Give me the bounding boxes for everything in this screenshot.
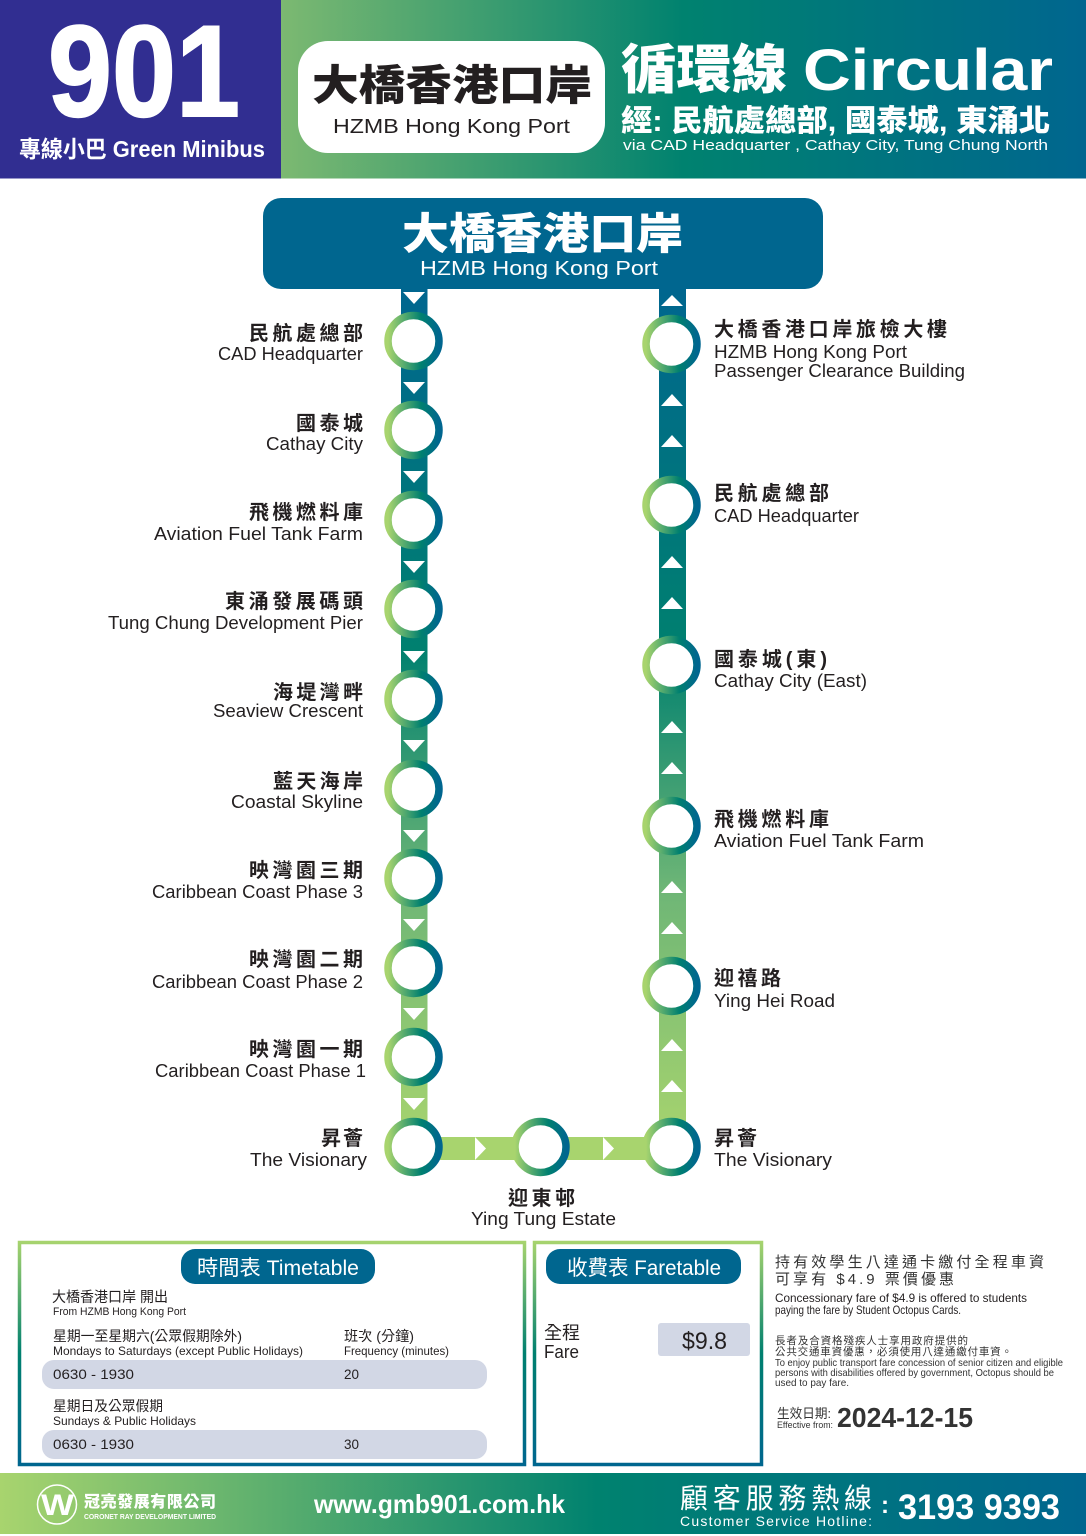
notes: senior concession [775,1334,1063,1389]
station: Cathay City: 國泰城 [296,412,363,435]
notes: student concession: Concessionary fare of $4.9 is offered to students [775,1291,1027,1305]
station: Coastal Skyline: Coastal Skyline [231,792,363,812]
route lines [401,285,686,1160]
station: Passenger Clearance Building: Passenger Clearance Building [714,361,965,381]
station markers [388,316,697,1172]
station: CAD Headquarter (right) [714,481,859,526]
circular route heading: 循環線 [621,41,787,100]
notes: student concession: 可享有 $4.9 票價優惠 [775,1270,954,1288]
weekday schedule: 20 [344,1366,359,1382]
departure point: 大橋香港口岸 開出 [52,1289,168,1306]
notes: senior concession: 公共交通車資優惠，必須使用八達通繳付車資。 [775,1345,1012,1358]
weekday schedule: 0630 - 1930 [53,1366,134,1382]
timetable heading: 時間表 Timetable [197,1257,359,1280]
company name: CORONET RAY DEVELOPMENT LIMITED [84,1514,216,1521]
fare label: 全程 [544,1323,580,1343]
station: Cathay City: Cathay City [266,434,363,454]
station: Aviation Fuel Tank Farm (right): Aviation Fuel Tank Farm [714,831,924,851]
hotline: : [881,1492,889,1519]
station: Caribbean Coast Phase 1: 映灣園一期 [249,1038,363,1061]
vehicle type label: 專線小巴 Green Minibus [19,136,265,162]
notes: senior concession: 長者及合資格殘疾人士享用政府提供的 [775,1334,968,1347]
destination pill [298,41,605,153]
station: Seaview Crescent: Seaview Crescent [213,701,363,721]
route number: 901 [48,0,240,144]
station: Ying Hei Road: 迎禧路 [714,967,781,990]
station: The Visionary (left): 昇薈 [321,1127,363,1150]
station: Passenger Clearance Building: 大橋香港口岸旅檢大樓 [714,317,947,341]
station: Seaview Crescent [213,681,363,721]
via stops: 經: 民航處總部, 國泰城, 東涌北 [621,104,1050,138]
station: Tung Chung Development Pier: 東涌發展碼頭 [225,590,363,613]
station: Passenger Clearance Building [714,317,965,381]
weekday schedule: 星期一至星期六(公眾假期除外) [53,1328,242,1344]
station: Coastal Skyline: 藍天海岸 [273,770,363,793]
station: The Visionary (left): The Visionary [250,1150,367,1170]
station labels: outbound [108,321,616,1229]
company name [84,1492,216,1521]
timetable heading [181,1249,375,1284]
station: Aviation Fuel Tank Farm: 飛機燃料庫 [249,501,363,524]
notes: student concession: 持有效學生八達通卡繳付全程車資 [775,1253,1044,1271]
station: Caribbean Coast Phase 2: 映灣園二期 [249,948,363,971]
station: Caribbean Coast Phase 1 [155,1038,366,1081]
header banner [281,0,1086,178]
sunday schedule: 30 [344,1436,359,1452]
station: CAD Headquarter [218,321,363,364]
hotline: 顧客服務熱線 [680,1483,872,1514]
station: The Visionary (right): The Visionary [714,1150,832,1170]
station: Caribbean Coast Phase 3: Caribbean Coast Phase 3 [152,882,363,902]
station: Cathay City East [714,648,867,691]
weekday schedule [42,1328,487,1389]
station: The Visionary (right) [714,1127,832,1170]
station: Cathay City East: 國泰城(東) [714,648,827,671]
weekday schedule: Mondays to Saturdays (except Public Holidays) [53,1344,303,1358]
hotline: Customer Service Hotline: [680,1513,872,1529]
station: Tung Chung Development Pier: Tung Chung Development Pier [108,613,363,633]
sunday schedule: 0630 - 1930 [53,1436,134,1452]
station: Ying Tung Estate [471,1187,616,1229]
departure point [52,1289,186,1318]
notes: student concession [775,1253,1044,1317]
station: Ying Hei Road: Ying Hei Road [714,991,835,1011]
weekday schedule: 班次 (分鐘) [344,1328,414,1344]
terminus box [263,198,823,289]
station: Ying Tung Estate: Ying Tung Estate [471,1209,616,1229]
station: Cathay City [266,412,363,454]
direction arrows [403,292,683,1160]
station: Cathay City East: Cathay City (East) [714,671,867,691]
icon: company logo: W [41,1489,75,1522]
station: Caribbean Coast Phase 1: Caribbean Coast Phase 1 [155,1061,366,1081]
station: Coastal Skyline [231,770,363,812]
icon: company logo [38,1485,76,1524]
station: CAD Headquarter: 民航處總部 [249,321,363,345]
destination pill: 大橋香港口岸 [312,62,592,109]
station: Ying Hei Road [714,967,835,1011]
station: Seaview Crescent: 海堤灣畔 [273,681,363,704]
notes: student concession: paying the fare by Student Octopus Cards. [775,1303,961,1317]
station: Aviation Fuel Tank Farm: Aviation Fuel Tank Farm [154,524,363,544]
route diagram [263,198,823,1172]
weekday schedule: Frequency (minutes) [344,1344,449,1358]
station: Aviation Fuel Tank Farm (right) [714,808,924,851]
via stops: via CAD Headquarter , Cathay City, Tung Chung North [623,137,1048,154]
hotline: 3193 9393 [898,1488,1060,1527]
effective date: 生效日期: [777,1406,831,1421]
station: CAD Headquarter (right): 民航處總部 [714,481,829,505]
destination pill: HZMB Hong Kong Port [333,116,571,138]
terminus box: 大橋香港口岸 [402,211,683,259]
footer band [0,1473,1086,1534]
faretable heading: 收費表 Faretable [567,1257,721,1280]
station: Passenger Clearance Building: HZMB Hong Kong Port [714,342,907,362]
effective date [777,1402,973,1433]
station: The Visionary (left) [250,1127,367,1170]
notes: senior concession: persons with disabilities offered by government, Octopus should be [775,1367,1054,1379]
station: Aviation Fuel Tank Farm (right): 飛機燃料庫 [714,808,829,831]
fare value [658,1323,750,1356]
terminus box: HZMB Hong Kong Port [420,258,659,280]
departure point: From HZMB Hong Kong Port [53,1306,186,1318]
notes: senior concession: used to pay fare. [775,1377,849,1389]
station labels: inbound [714,317,965,1170]
company name: 冠亮發展有限公司 [84,1492,216,1511]
sunday schedule [42,1398,487,1459]
sunday schedule: 星期日及公眾假期 [53,1398,163,1414]
website: www.gmb901.com.hk [313,1489,566,1519]
fare label: Fare [544,1342,579,1362]
station: Caribbean Coast Phase 3: 映灣園三期 [249,859,363,882]
station: Caribbean Coast Phase 2: Caribbean Coast Phase 2 [152,972,363,992]
station: Ying Tung Estate: 迎東邨 [508,1187,575,1210]
station: Tung Chung Development Pier [108,590,363,633]
station: Aviation Fuel Tank Farm [154,501,363,544]
station: The Visionary (right): 昇薈 [714,1127,757,1150]
fare value: $9.8 [682,1328,727,1355]
station: Caribbean Coast Phase 2 [152,948,363,992]
effective date: Effective from: [777,1420,833,1431]
fare label [544,1323,580,1362]
station: CAD Headquarter: CAD Headquarter [218,344,363,364]
station: Caribbean Coast Phase 3 [152,859,363,902]
panel: faretable [534,1242,762,1464]
faretable heading [546,1249,741,1284]
circular route heading: Circular [803,38,1053,103]
circular route heading [621,38,1053,103]
sunday schedule: Sundays & Public Holidays [53,1414,196,1428]
panel: timetable [20,1242,524,1464]
station: CAD Headquarter (right): CAD Headquarter [714,506,859,526]
hotline [680,1483,1060,1529]
effective date: 2024-12-15 [837,1402,973,1433]
via stops [621,104,1050,154]
route number panel [0,0,281,178]
